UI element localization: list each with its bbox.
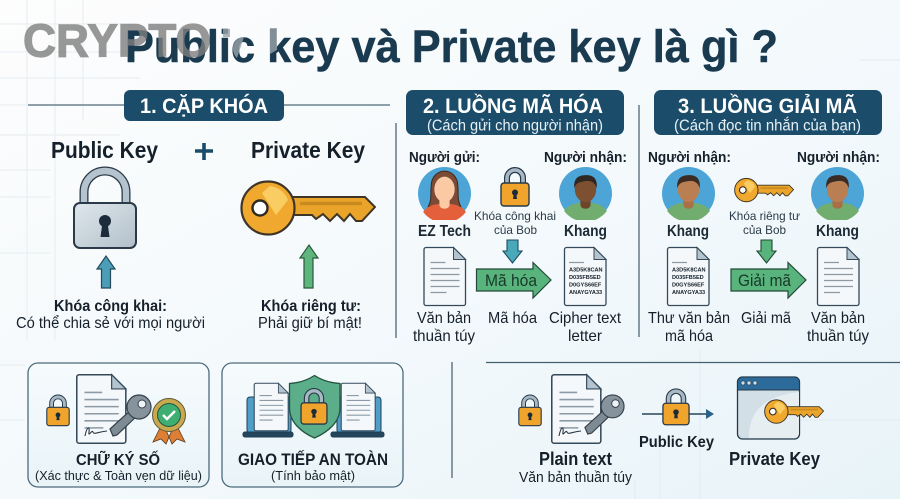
labels: encryption steps (413, 310, 622, 345)
icon: laptops (243, 397, 384, 437)
icon: signed document (77, 375, 126, 443)
labels: decryption steps (648, 310, 869, 345)
labels: decryption steps: mã hóa (665, 328, 713, 345)
label: sender: Người gửi: (409, 149, 480, 166)
heading: section 2: 2. LUỒNG MÃ HÓA (423, 94, 603, 118)
text: secure communication: GIAO TIẾP AN TOÀN (238, 450, 388, 469)
icon: browser window (738, 377, 800, 439)
panel: secure communication card (222, 363, 403, 487)
icon: gold key small (735, 178, 794, 202)
labels: decryption steps: Giải mã (741, 310, 791, 327)
text: digital signature: CHỮ KÝ SỐ (76, 449, 160, 469)
icon: left document (254, 383, 288, 431)
icon: plain document (818, 248, 859, 306)
label: EZ Tech: EZ Tech (418, 223, 471, 240)
watermark: CRYPTO: CRYPTO (23, 14, 211, 66)
text: private key of Bob: Khóa riêng tư (729, 209, 800, 223)
text: public key of Bob: Khóa công khai (474, 209, 556, 223)
icon: plain document (424, 248, 466, 306)
text: digital signature (35, 449, 202, 483)
arrow: blue up (97, 256, 115, 288)
arrow: encrypt (476, 262, 551, 298)
text: public key caption: Có thể chia sẻ với mọi người (16, 315, 205, 332)
arrow: down green (757, 240, 776, 263)
icon: silver padlock (74, 171, 136, 248)
text: private key caption: Phải giữ bí mật! (258, 315, 362, 332)
text: private key caption: Khóa riêng tư: (261, 298, 361, 315)
arrow: green up (300, 245, 318, 288)
icon: right document (341, 383, 375, 431)
label: Private Key: Private Key (729, 449, 820, 469)
icon: gold key (242, 182, 375, 234)
icon: cipher document (668, 248, 709, 306)
labels: decryption steps: Thư văn bản (648, 310, 730, 327)
icon: man avatar (559, 167, 612, 222)
label: receiver left: Người nhận: (648, 149, 731, 166)
label: Public Key: Public Key (51, 137, 158, 163)
heading: section 1: 1. CẶP KHÓA (140, 94, 268, 118)
label: Khang right: Khang (816, 223, 859, 240)
label: receiver: Người nhận: (544, 149, 627, 166)
text: secure communication (238, 450, 388, 483)
arrow: down teal (503, 240, 522, 263)
icon: signed document (552, 375, 601, 443)
icon: gray key (110, 395, 151, 436)
heading: section 1 (124, 90, 284, 121)
icon: gray key (585, 395, 624, 434)
label: Khang: Khang (564, 223, 607, 240)
labels: encryption steps: thuần túy (413, 328, 475, 345)
text: private key caption (258, 298, 362, 332)
arrow: decrypt: Giải mã (738, 272, 792, 290)
panel: 3. decryption flow (648, 90, 882, 345)
arrow: decrypt (731, 262, 806, 298)
text: private key of Bob: của Bob (743, 223, 786, 237)
icon: plus (195, 143, 213, 160)
heading: section 3: 3. LUỒNG GIẢI MÃ (678, 94, 857, 118)
icon: green shield with lock (290, 376, 340, 438)
text: public key caption (16, 298, 205, 332)
icon: gold key (765, 400, 824, 423)
text: secure communication: (Tính bảo mật) (271, 468, 355, 483)
labels: encryption steps: letter (568, 328, 603, 345)
text: plain text (519, 449, 633, 486)
arrow: encrypt: Mã hóa (485, 272, 538, 290)
icon: ribbon badge (152, 398, 186, 444)
panel: digital signature card (28, 363, 209, 487)
text: digital signature: (Xác thực & Toàn vẹn dữ liệu) (35, 468, 202, 483)
labels: decryption steps: thuần túy (807, 328, 869, 345)
labels: encryption steps: Mã hóa (488, 310, 537, 327)
label: Khang left: Khang (667, 223, 709, 240)
icon: small lock (47, 397, 69, 426)
icon: man avatar left (662, 167, 715, 222)
text: plain text: Plain text (539, 449, 612, 469)
text: public key of Bob: của Bob (494, 223, 537, 237)
heading: section 2: (Cách gửi cho người nhận) (427, 118, 603, 134)
icon: cipher document (564, 248, 606, 306)
labels: decryption steps: Văn bản (811, 310, 865, 327)
text: public key caption: Khóa công khai: (54, 298, 167, 315)
heading: section 2 (406, 90, 624, 135)
heading: section 3: (Cách đọc tin nhắn của bạn) (674, 118, 861, 134)
text: plain text: Văn bản thuần túy (519, 470, 633, 486)
heading: section 3 (654, 90, 882, 135)
icon: small lock (519, 397, 541, 426)
title: Public key và Private key là gì ? (125, 21, 778, 72)
text: public key of Bob (474, 209, 556, 237)
panel: summary row (519, 375, 824, 486)
label: Public Key: Public Key (639, 434, 714, 451)
icon: woman avatar (418, 167, 471, 223)
text: private key of Bob (729, 209, 800, 237)
icon: gold lock (501, 170, 529, 206)
panel: 1. key pair (16, 90, 390, 332)
icon: man avatar right (811, 167, 864, 222)
panel: 2. encryption flow (406, 90, 627, 345)
label: Private Key: Private Key (251, 137, 365, 163)
arrow: public key flow (642, 409, 714, 419)
labels: encryption steps: Cipher text (549, 310, 622, 327)
label: receiver right: Người nhận: (797, 149, 880, 166)
labels: encryption steps: Văn bản (417, 310, 471, 327)
icon: lock on arrow (663, 391, 689, 425)
